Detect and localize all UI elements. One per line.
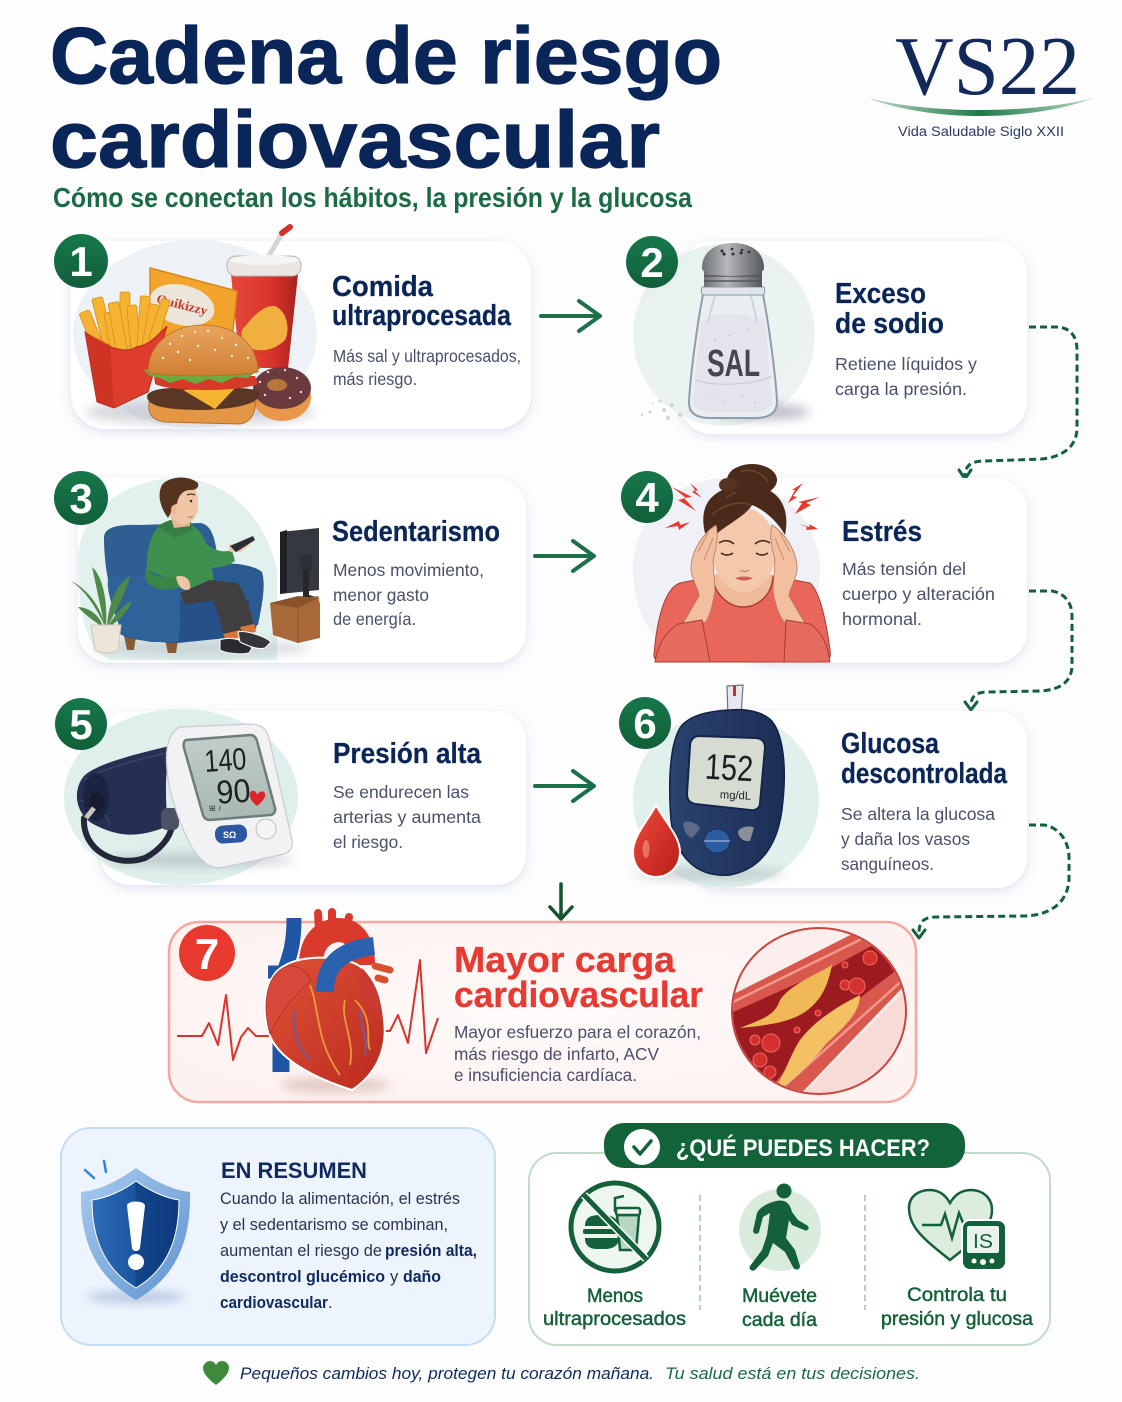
icon: clogged artery	[731, 927, 907, 1095]
summary text: cardiovascular	[220, 1294, 329, 1312]
text: menos ultraprocesados	[543, 1286, 686, 1330]
step 5 text	[333, 782, 481, 852]
arrow 6 to 7 dashed	[913, 825, 1069, 938]
step 2 heading: de sodio	[835, 308, 944, 340]
step 7 text: Mayor esfuerzo para el corazón,	[454, 1022, 701, 1042]
step 1 text: Más sal y ultraprocesados,	[333, 346, 521, 366]
badge 3: 3	[69, 475, 93, 522]
step 6 text: Se altera la glucosa	[841, 804, 995, 824]
step 7 text: e insuficiencia cardíaca.	[454, 1065, 637, 1085]
icon: blood pressure monitor: 90	[215, 772, 252, 811]
logo: VS22: Vida Saludable Siglo XXII	[898, 124, 1064, 139]
chart: ecg line	[177, 960, 438, 1060]
footer message: Pequeños cambios hoy, protegen tu corazón mañana.	[240, 1364, 654, 1383]
panel: step 1 comida ultraprocesada	[54, 227, 531, 429]
icon: salt shaker	[641, 243, 810, 420]
footer closing message: Tu salud está en tus decisiones.	[665, 1364, 920, 1383]
step 4 text: hormonal.	[842, 609, 922, 629]
badge 6	[619, 697, 671, 749]
badge 4: 4	[635, 474, 659, 521]
step 7 heading: cardiovascular	[454, 974, 703, 1015]
summary text: Cuando la alimentación, el estrés	[220, 1190, 460, 1208]
text: controla tu presion y glucosa	[881, 1285, 1033, 1330]
arrow 5 to 6	[535, 771, 594, 801]
panel: step 4 estres	[621, 464, 1027, 663]
badge 1: 1	[69, 238, 93, 285]
panel: step 2 exceso de sodio	[626, 236, 1027, 434]
step 2 text: carga la presión.	[835, 379, 967, 399]
step 5 text: Se endurecen las	[333, 782, 469, 802]
step 1 heading	[332, 271, 512, 332]
summary text: .	[328, 1294, 333, 1312]
summary text: presión alta,	[385, 1242, 477, 1260]
icon: fast food	[79, 227, 315, 425]
title: cardiovascular	[50, 95, 660, 184]
icon: heart with pulse and glucose meter	[909, 1190, 1006, 1270]
header pill	[604, 1123, 965, 1168]
step 3 text	[333, 560, 484, 629]
step 3 heading: Sedentarismo	[332, 516, 500, 548]
step 7 text	[454, 1022, 701, 1085]
step 5 text: arterias y aumenta	[333, 807, 481, 827]
step 3 text: Menos movimiento,	[333, 560, 484, 580]
step 4 text: cuerpo y alteración	[842, 584, 995, 604]
summary heading: EN RESUMEN	[221, 1158, 367, 1183]
panel: step 7 mayor carga cardiovascular	[169, 912, 916, 1105]
step 2 heading	[835, 278, 944, 340]
text: menos ultraprocesados: Menos	[587, 1286, 643, 1307]
arrow 2 to 3 dashed	[959, 327, 1077, 479]
arrow 5 to 7 down	[550, 884, 572, 919]
step 4 text: Más tensión del	[842, 559, 966, 579]
summary text: descontrol glucémico	[220, 1268, 385, 1286]
icon: man on sofa watching TV	[71, 477, 320, 657]
arrow 3 to 4	[535, 541, 594, 571]
icon: walking person	[739, 1184, 821, 1271]
logo: VS22: VS22	[895, 20, 1080, 113]
summary text	[220, 1190, 477, 1312]
panel: que puedes hacer	[529, 1123, 1050, 1345]
title	[50, 11, 722, 184]
step 6 text: sanguíneos.	[841, 854, 934, 874]
icon: stressed woman	[654, 464, 830, 662]
icon: glucose meter and blood drop	[633, 685, 785, 880]
panel: en resumen	[61, 1128, 495, 1345]
icon: heart with pulse and glucose meter: IS	[973, 1231, 993, 1253]
step 2 text	[835, 354, 977, 399]
badge 2	[626, 236, 678, 288]
arrow 4 to 5 dashed	[965, 591, 1072, 710]
text: muevete cada dia: cada día	[742, 1310, 817, 1331]
summary text: y	[390, 1268, 399, 1286]
arrow 1 to 2	[541, 301, 600, 331]
badge 7: 7	[195, 930, 219, 979]
step 1 text: más riesgo.	[333, 369, 417, 389]
summary text: y el sedentarismo se combinan,	[220, 1216, 448, 1234]
text: muevete cada dia	[742, 1286, 817, 1331]
step 2 heading: Exceso	[835, 278, 926, 310]
step 6 text: y daña los vasos	[841, 829, 970, 849]
header pill: ¿QUÉ PUEDES HACER?	[676, 1134, 930, 1162]
icon: blood pressure monitor: SΩ	[223, 830, 236, 840]
icon: no fast food	[571, 1183, 659, 1271]
text: controla tu presion y glucosa: Controla tu	[907, 1285, 1007, 1306]
icon: anatomical heart	[265, 912, 390, 1093]
panel: step 3 sedentarismo	[54, 471, 526, 663]
step 7 text: más riesgo de infarto, ACV	[454, 1044, 659, 1064]
text: menos ultraprocesados: ultraprocesados	[543, 1309, 686, 1330]
icon: glucose meter and blood drop: mg/dL	[720, 789, 752, 803]
step 7 heading	[454, 939, 703, 1015]
badge 5: 5	[69, 701, 93, 748]
icon: salt shaker: SAL	[707, 343, 760, 385]
icon: blood pressure monitor: ⊞ ♪	[209, 803, 222, 813]
icon: glucose meter and blood drop: 152	[704, 746, 754, 789]
step 1 text	[333, 346, 521, 389]
title: Cadena de riesgo	[50, 11, 722, 100]
footer	[203, 1361, 920, 1385]
step 4 text	[842, 559, 995, 629]
panel: step 5 presion alta	[55, 698, 526, 885]
step 7 heading: Mayor carga	[454, 939, 676, 980]
step 2 text: Retiene líquidos y	[835, 354, 977, 374]
logo: VS22	[868, 20, 1094, 139]
badge 2: 2	[640, 239, 664, 286]
badge 6: 6	[633, 700, 657, 747]
step 6 text	[841, 804, 995, 874]
icon: blood pressure monitor	[77, 724, 295, 868]
step 1 heading: Comida	[332, 271, 434, 303]
step 6 heading: descontrolada	[841, 758, 1008, 790]
icon: fast food: Quikizzy	[155, 291, 210, 318]
text: muevete cada dia: Muévete	[742, 1286, 817, 1307]
step 6 heading: Glucosa	[841, 728, 940, 760]
icon: blood pressure monitor: 140	[203, 741, 247, 779]
icon: green heart	[203, 1361, 229, 1385]
step 5 text: el riesgo.	[333, 832, 403, 852]
icon: shield with exclamation	[81, 1161, 190, 1303]
badge 7	[179, 925, 235, 981]
step 5 heading: Presión alta	[333, 738, 482, 770]
summary text: aumentan el riesgo de	[220, 1242, 382, 1260]
badge 5	[55, 698, 107, 750]
summary text: daño	[403, 1268, 441, 1286]
step 6 heading	[841, 728, 1008, 790]
step 4 heading: Estrés	[842, 516, 922, 548]
badge 3	[54, 471, 108, 525]
panel: step 6 glucosa descontrolada	[619, 685, 1027, 888]
subtitle: Cómo se conectan los hábitos, la presión y la glucosa	[53, 182, 692, 213]
step 3 text: de energía.	[333, 609, 416, 629]
step 1 heading: ultraprocesada	[332, 300, 512, 332]
badge 1	[54, 234, 108, 288]
step 3 text: menor gasto	[333, 585, 429, 605]
badge 4	[621, 471, 673, 523]
text: controla tu presion y glucosa: presión y glucosa	[881, 1309, 1033, 1330]
